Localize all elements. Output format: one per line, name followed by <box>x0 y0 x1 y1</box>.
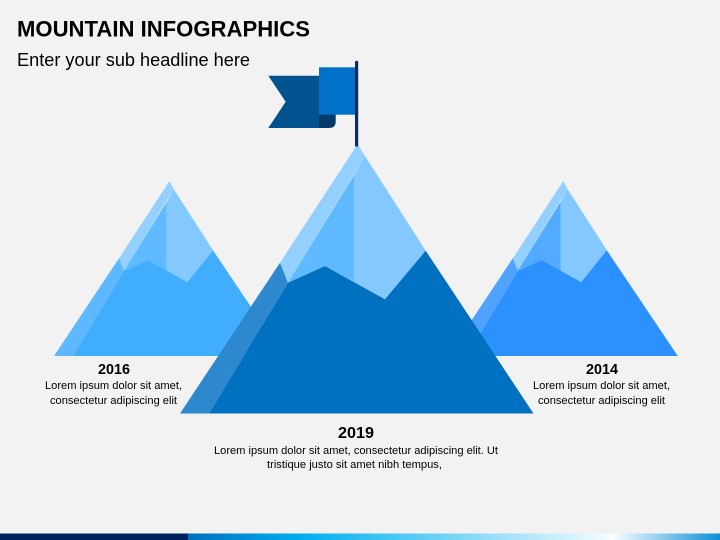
right mountain 2014 <box>448 181 678 356</box>
label: 2014: consectetur adipiscing elit <box>538 395 665 407</box>
label: 2019: Lorem ipsum dolor sit amet, consectetur adipiscing elit. Ut <box>214 445 498 457</box>
label: 2016: consectetur adipiscing elit <box>50 395 177 407</box>
label: 2014 <box>533 362 670 407</box>
center mountain 2019 <box>180 144 534 414</box>
footer bar <box>0 534 720 540</box>
label: 2019 <box>214 425 498 471</box>
left mountain 2016 <box>54 181 284 356</box>
label: 2014: 2014 <box>586 362 618 378</box>
subtitle: Enter your sub headline here <box>17 49 250 70</box>
label: 2016 <box>45 362 182 407</box>
icon: flag <box>268 61 358 147</box>
title: MOUNTAIN INFOGRAPHICS <box>17 16 310 42</box>
label: 2019: 2019 <box>338 425 374 442</box>
label: 2016: 2016 <box>98 362 130 378</box>
label: 2014: Lorem ipsum dolor sit amet, <box>533 380 670 392</box>
label: 2016: Lorem ipsum dolor sit amet, <box>45 380 182 392</box>
label: 2019: tristique justo sit amet nibh tempus, <box>267 459 442 471</box>
